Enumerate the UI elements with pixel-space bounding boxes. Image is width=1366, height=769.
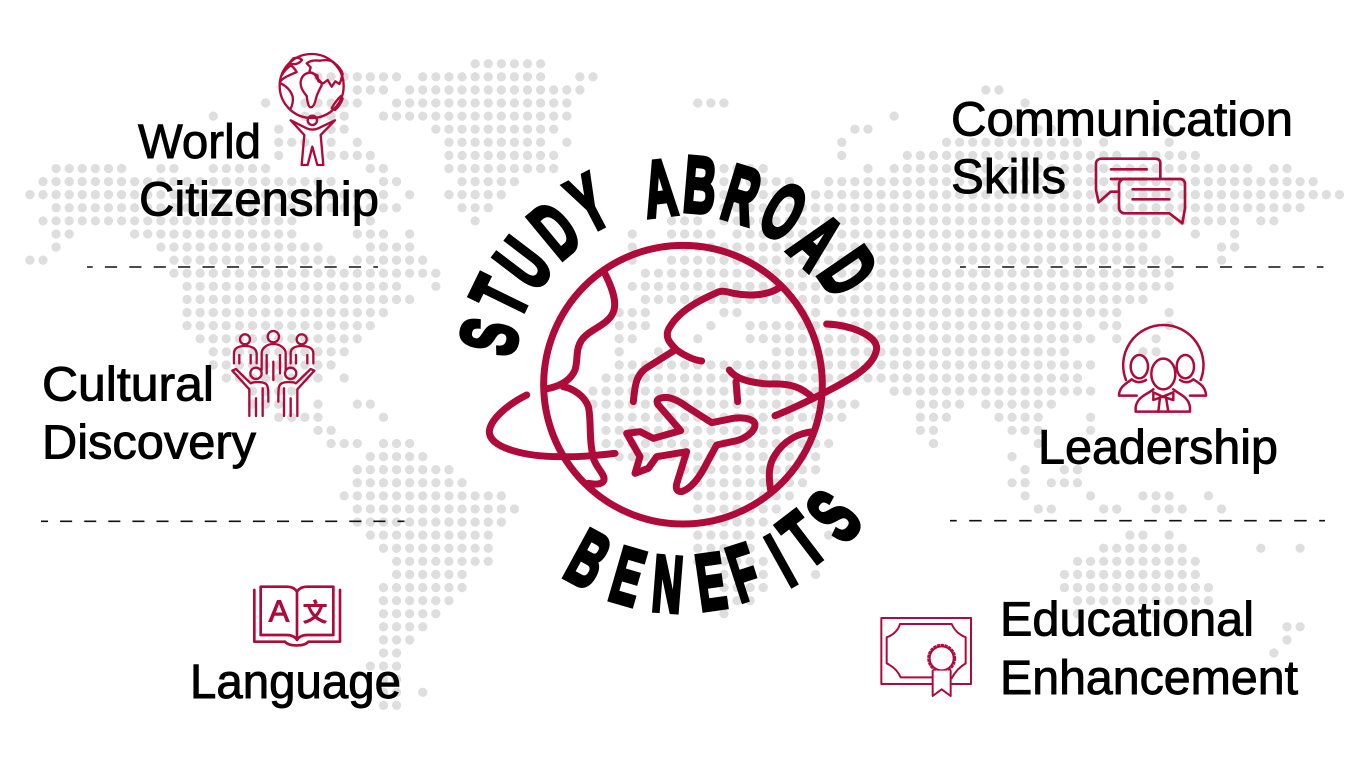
title: BENEFITS: N <box>649 540 686 630</box>
divider: left top <box>87 266 378 268</box>
title: STUDY ABROAD: A <box>774 198 859 286</box>
title: STUDY ABROAD: R <box>713 148 770 242</box>
icon: team in circle <box>1119 325 1206 412</box>
title: BENEFITS <box>553 475 878 630</box>
benefit: Leadership <box>1038 325 1278 474</box>
plane <box>627 397 755 492</box>
title: STUDY ABROAD: A <box>639 143 681 235</box>
divider: left bottom <box>41 520 404 522</box>
title: BENEFITS: B <box>553 513 624 606</box>
dotted world map background <box>30 64 1340 705</box>
title: STUDY ABROAD: B <box>680 140 720 231</box>
title: BENEFITS: F <box>718 528 769 619</box>
benefit: Cultural Discovery <box>42 331 314 470</box>
icon: open book with translation: A <box>269 595 290 629</box>
icon: group of people <box>232 331 314 416</box>
icon: person holding globe <box>280 54 344 165</box>
icon: certificate with seal <box>881 618 971 696</box>
title: BENEFITS: S <box>790 475 878 557</box>
benefit: Educational Enhancement: Enhancement <box>1000 651 1299 705</box>
divider: right bottom <box>950 520 1325 522</box>
label: Leadership <box>1038 420 1278 474</box>
title: STUDY ABROAD: Y <box>554 156 623 250</box>
label: Communication <box>951 92 1293 146</box>
label: World <box>138 115 261 169</box>
title: STUDY ABROAD <box>443 140 895 363</box>
title: STUDY ABROAD: U <box>478 223 569 303</box>
title: STUDY ABROAD: T <box>454 264 546 329</box>
label: Cultural <box>42 358 214 412</box>
benefit: World Citizenship <box>138 54 379 226</box>
label: Educational <box>1000 592 1254 646</box>
title: BENEFITS: I <box>754 519 808 603</box>
title: STUDY ABROAD: D <box>514 185 596 275</box>
label: Language <box>190 655 401 709</box>
title: BENEFITS: E <box>601 529 654 623</box>
icon: open book with translation: 文 <box>302 600 328 628</box>
icon: open book with translation <box>254 587 340 645</box>
title: STUDY ABROAD: D <box>802 233 895 311</box>
central logo: globe, plane and curved title <box>443 140 895 630</box>
benefit: Communication Skills <box>951 92 1293 223</box>
divider: right top <box>960 266 1324 268</box>
benefit: Cultural Discovery: Discovery <box>42 416 257 470</box>
globe with continents and orbit <box>489 245 877 524</box>
title: STUDY ABROAD: O <box>746 165 820 259</box>
title: STUDY ABROAD: S <box>443 311 536 363</box>
benefit: Communication Skills: Skills <box>951 150 1066 204</box>
icon: speech bubbles <box>1096 159 1185 223</box>
benefit: Language <box>190 587 401 709</box>
benefit: World Citizenship: Citizenship <box>139 172 379 226</box>
title: BENEFITS: T <box>764 495 841 583</box>
benefit: Educational Enhancement <box>881 592 1299 705</box>
title: BENEFITS: E <box>691 535 731 628</box>
